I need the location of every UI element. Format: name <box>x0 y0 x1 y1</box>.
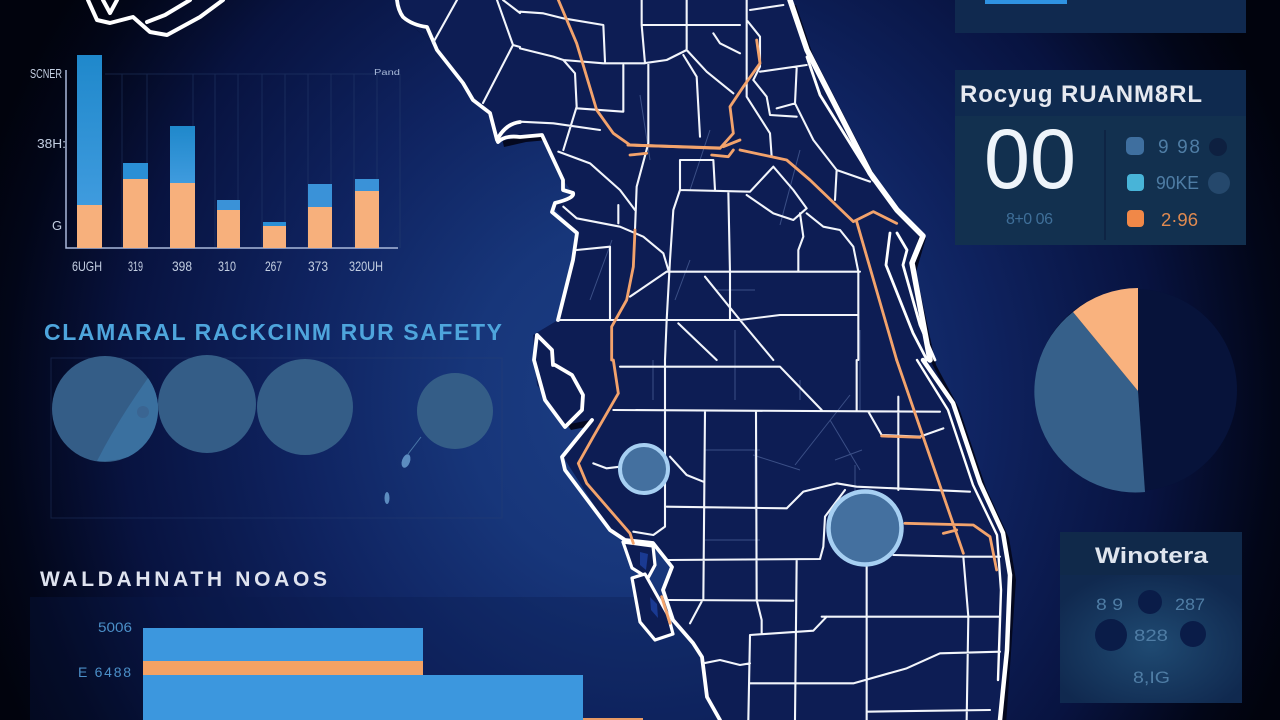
x axis labels: 373 <box>308 258 328 274</box>
panel: winotera <box>1060 532 1242 703</box>
coastline <box>88 0 1010 720</box>
land <box>395 0 1010 720</box>
bar labels: 5006 <box>98 619 132 635</box>
bar labels <box>78 619 132 680</box>
legend row 1: 9 98 <box>1158 137 1200 158</box>
panel: winotera: 287 <box>1175 595 1205 614</box>
legend row 3 <box>1127 210 1198 230</box>
bar 7 <box>355 179 379 248</box>
heading: roads: WALDAHNATH NOAOS <box>40 568 327 591</box>
bar 5 <box>263 222 286 248</box>
y axis labels: SCNER <box>30 66 62 81</box>
horizontal bar bottom <box>143 675 583 720</box>
map node: east <box>828 492 902 564</box>
bar 6 <box>308 184 332 248</box>
x axis labels: 320UH <box>349 258 383 274</box>
panel: stacked bar chart <box>30 55 400 274</box>
y axis labels: G <box>52 218 62 233</box>
x axis labels: 267 <box>265 258 282 274</box>
y axis labels <box>30 66 66 233</box>
legend row 2: 90KE <box>1156 173 1199 193</box>
panel: winotera: 8,IG <box>1133 668 1170 687</box>
pie chart <box>1034 288 1237 492</box>
map node: west <box>620 445 668 493</box>
bar 3 <box>170 126 195 248</box>
big value caption: 8+0 06 <box>1006 211 1053 228</box>
x axis labels: 310 <box>218 258 236 274</box>
map of Florida <box>88 0 1016 720</box>
legend row 2 <box>1127 172 1230 194</box>
pie slice: steel <box>1034 312 1145 492</box>
legend row 1 <box>1126 137 1227 158</box>
x axis labels <box>72 258 383 274</box>
pie slice: orange <box>1073 288 1138 391</box>
dark dots <box>1095 590 1206 651</box>
legend label: Pand <box>374 68 400 77</box>
orange sliver <box>583 718 643 720</box>
horizontal bar orange <box>143 661 423 675</box>
horizontal bar top <box>143 628 423 661</box>
panel title: Winotera <box>1095 543 1209 568</box>
y axis labels: 38H: <box>37 136 66 151</box>
gulf islands <box>623 542 673 640</box>
small dots <box>384 437 421 504</box>
north roads <box>520 0 870 360</box>
bubble 4 <box>417 373 493 449</box>
northwest roads <box>433 0 520 103</box>
bar 4 <box>217 200 240 248</box>
faint secondary roads <box>590 95 862 540</box>
bar 2 <box>123 163 148 248</box>
panel: rocyug summary <box>955 70 1246 245</box>
bubble 2 <box>158 355 256 453</box>
panel: top right <box>955 0 1246 33</box>
south roads <box>593 360 1000 720</box>
x axis labels: 319 <box>128 258 143 274</box>
panel: winotera: 8 9 <box>1096 595 1123 614</box>
panel: bubble chart <box>51 355 502 518</box>
bubble 1 <box>52 356 158 462</box>
highway routes <box>558 0 997 623</box>
x axis labels: 6UGH <box>72 258 102 274</box>
bar 1 <box>77 55 102 248</box>
panel: winotera: 828 <box>1134 626 1168 645</box>
heading: safety: CLAMARAL RACKCINM RUR SAFETY <box>44 319 502 345</box>
bubble 3 <box>257 359 353 455</box>
panel title: Rocyug RUANM8RL <box>960 81 1202 108</box>
legend row 3: 2·96 <box>1161 210 1198 230</box>
main road grid <box>433 0 1000 720</box>
big zero value: 00 <box>984 112 1076 206</box>
bar labels: E 6488 <box>78 664 131 680</box>
x axis labels: 398 <box>172 258 192 274</box>
panel: horizontal bars <box>30 597 730 720</box>
